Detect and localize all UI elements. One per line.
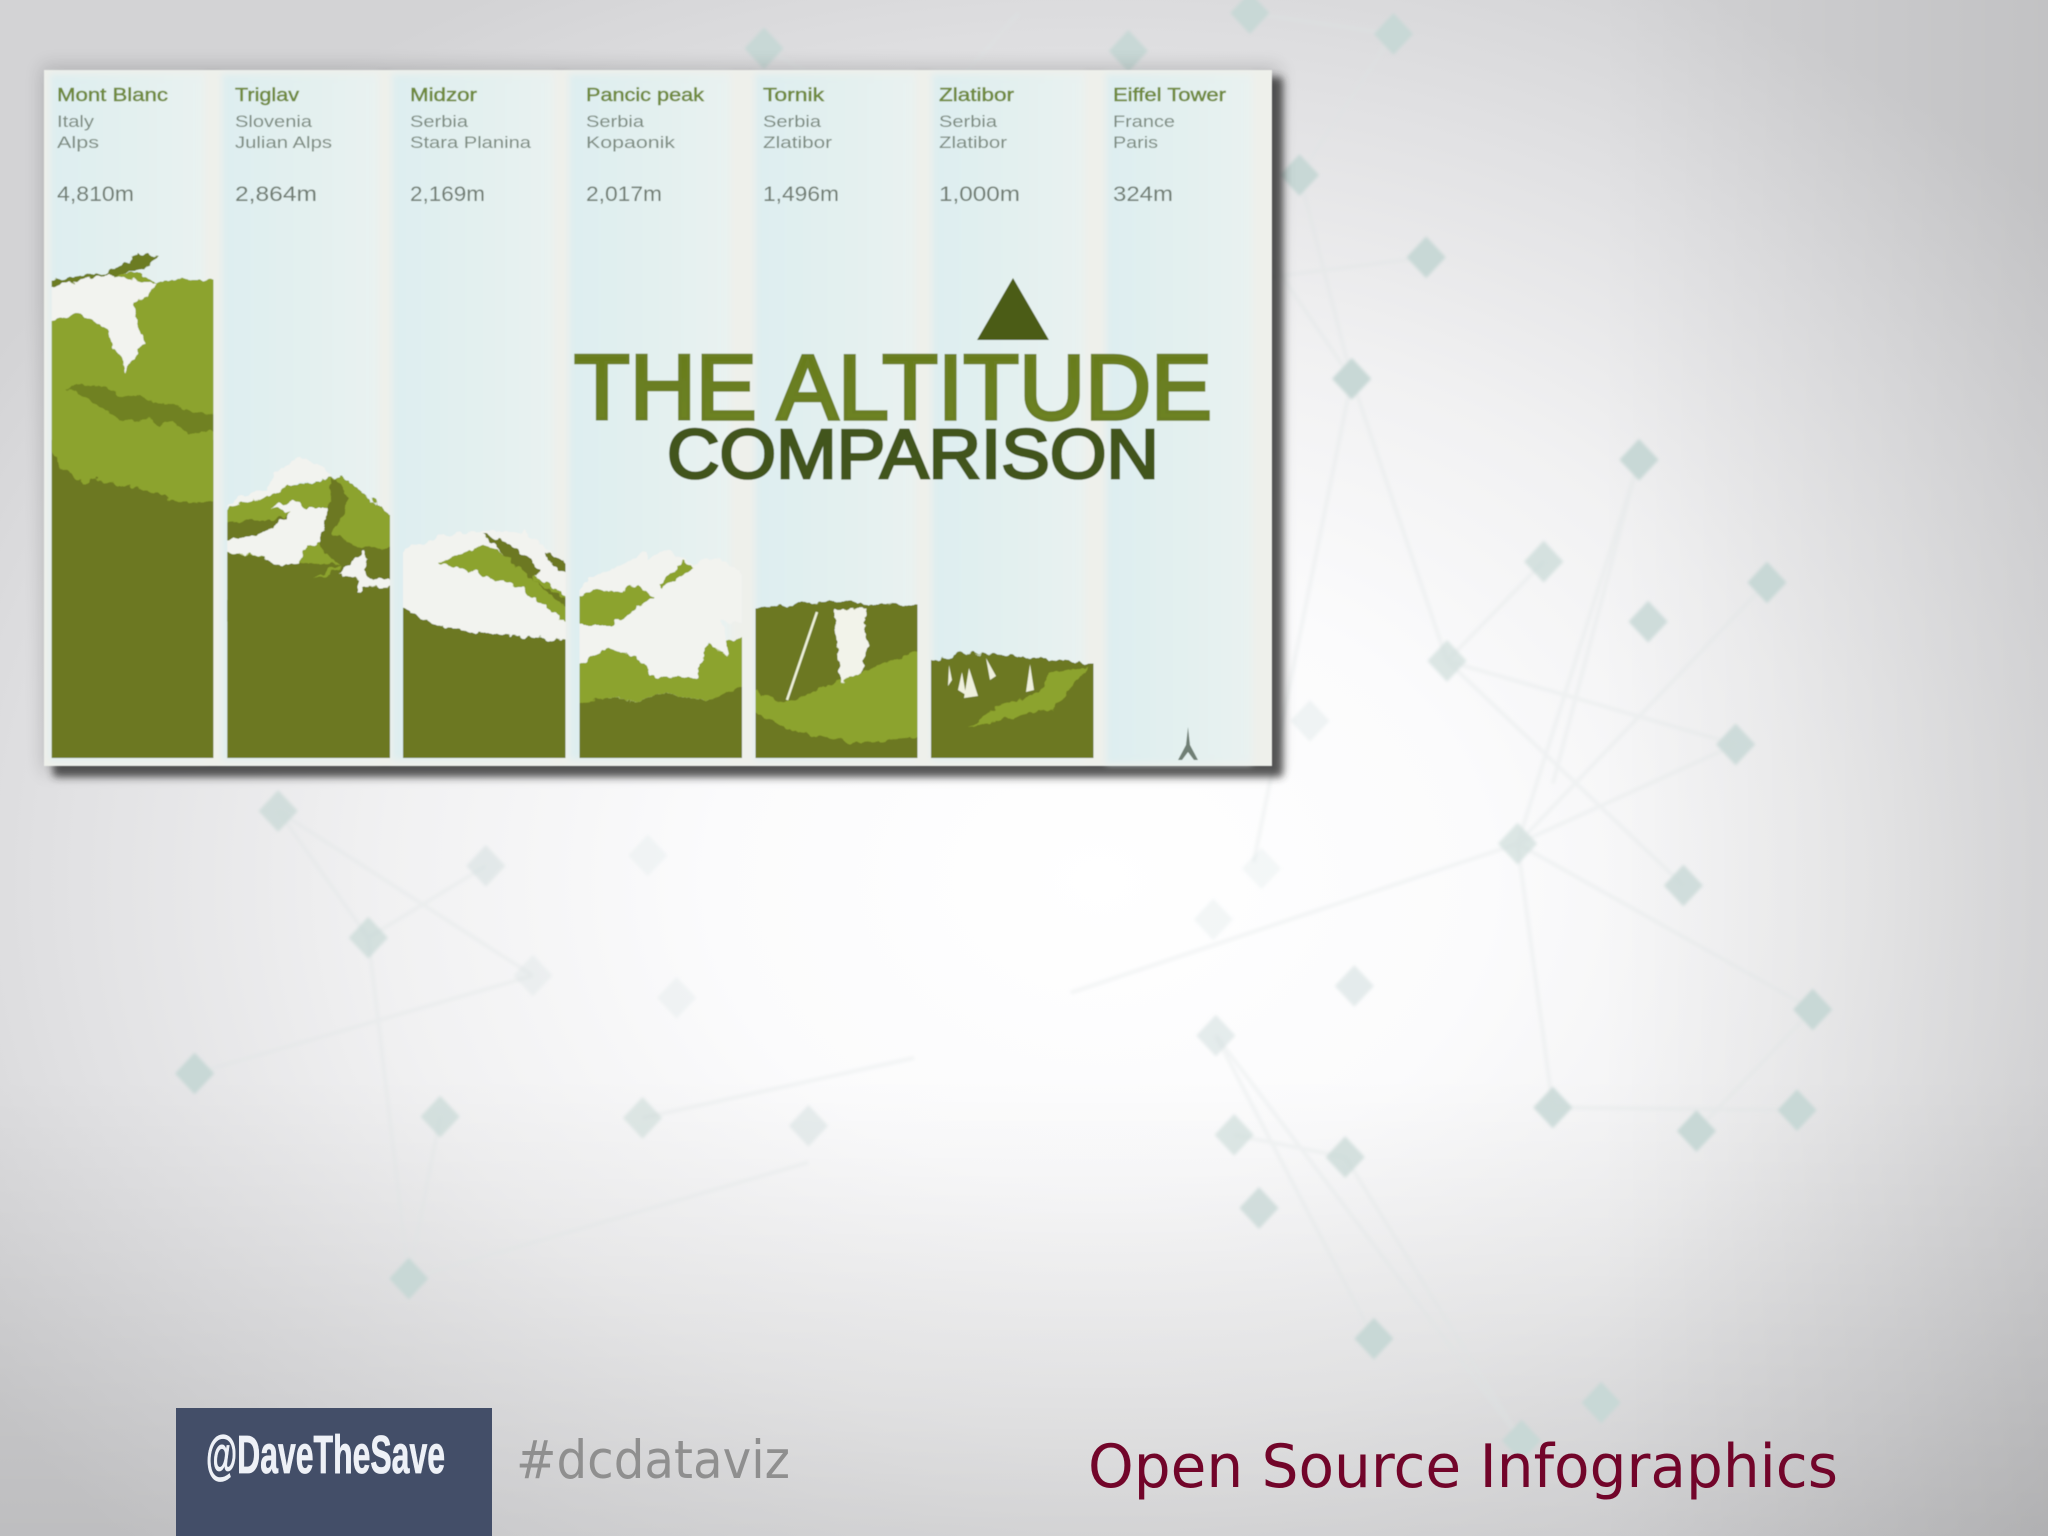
footer: talk title: Open Source Infographics <box>1088 1432 1838 1502</box>
labels: Eiffel Tower: 324m <box>1113 183 1173 206</box>
column: Zlatibor <box>930 650 1094 759</box>
labels: Eiffel Tower: France <box>1113 112 1175 131</box>
column: Triglav <box>220 458 398 765</box>
icon: title triangle <box>977 278 1049 340</box>
labels: Pancic peak: Serbia <box>586 112 645 131</box>
icon: Eiffel Tower <box>1178 727 1198 760</box>
labels: Mont Blanc: Mont Blanc <box>57 85 168 105</box>
footer: hashtag: #dcdataviz <box>516 1430 790 1491</box>
labels: Tornik: 1,496m <box>763 183 839 206</box>
labels: Midzor: 2,169m <box>410 183 485 206</box>
labels: Zlatibor: 1,000m <box>939 183 1020 206</box>
column: Tornik <box>748 602 926 765</box>
labels: Mont Blanc: 4,810m <box>57 183 134 206</box>
panel shadow <box>42 66 1283 777</box>
labels: Triglav: Julian Alps <box>235 133 332 152</box>
labels: Midzor: Serbia <box>410 112 469 131</box>
labels: Eiffel Tower <box>1113 85 1226 206</box>
column: Mont Blanc <box>44 253 222 765</box>
labels: Midzor: Stara Planina <box>410 133 532 152</box>
labels: Zlatibor: Serbia <box>939 112 998 131</box>
labels: Tornik <box>763 85 839 206</box>
labels: Eiffel Tower: Eiffel Tower <box>1113 85 1226 105</box>
labels: Triglav <box>235 85 332 206</box>
labels: Triglav: 2,864m <box>235 183 317 206</box>
labels: Mont Blanc: Alps <box>57 133 99 152</box>
labels: Pancic peak: 2,017m <box>586 183 662 206</box>
column: Pancic peak <box>578 550 742 759</box>
labels: Triglav: Triglav <box>235 85 299 105</box>
column: Midzor <box>396 532 574 765</box>
footer: handle box <box>176 1408 492 1536</box>
labels: Mont Blanc <box>57 85 168 206</box>
labels: Triglav: Slovenia <box>235 112 313 131</box>
title: COMPARISON <box>667 415 1159 493</box>
labels: Mont Blanc: Italy <box>57 112 95 131</box>
labels: Tornik: Tornik <box>763 85 825 105</box>
labels: Tornik: Zlatibor <box>763 133 832 152</box>
footer: handle box: @DaveTheSave <box>206 1425 445 1485</box>
labels: Zlatibor <box>939 85 1020 206</box>
title <box>574 337 1212 493</box>
background network: lines and diamonds <box>175 0 1832 1461</box>
labels: Midzor <box>410 85 532 206</box>
labels: Pancic peak <box>586 85 705 206</box>
labels: Zlatibor: Zlatibor <box>939 133 1007 152</box>
labels: Zlatibor: Zlatibor <box>939 85 1014 105</box>
title: THE ALTITUDE <box>574 337 1212 439</box>
labels: Pancic peak: Kopaonik <box>586 133 676 152</box>
labels: Pancic peak: Pancic peak <box>586 85 705 105</box>
sky columns <box>50 74 1252 764</box>
panel: altitude comparison infographic <box>44 70 1272 766</box>
labels: Midzor: Midzor <box>410 85 477 105</box>
labels: Eiffel Tower: Paris <box>1113 133 1158 152</box>
labels: Tornik: Serbia <box>763 112 822 131</box>
